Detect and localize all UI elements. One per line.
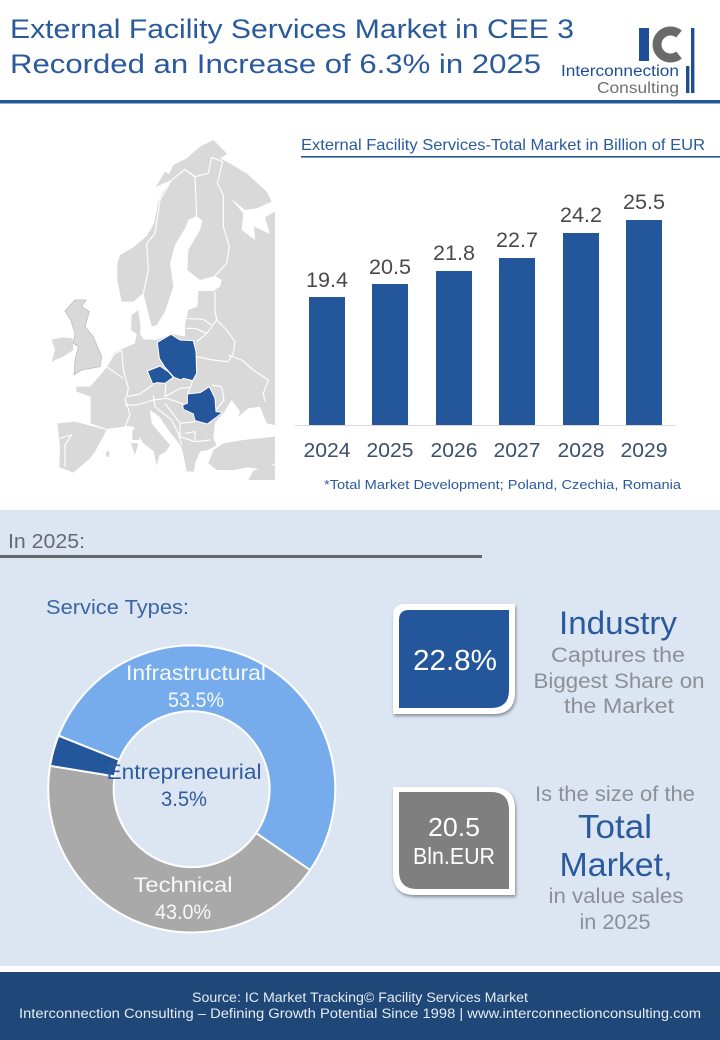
callout text: Industry: the Market	[564, 695, 674, 718]
callout text: Industry: Industry	[559, 605, 677, 641]
year labels	[304, 440, 668, 462]
section heading: In 2025: In 2025:	[8, 531, 85, 553]
bar values: 22.7	[496, 229, 538, 252]
year labels: 2025	[366, 440, 414, 462]
donut labels: 3.5%	[161, 788, 207, 811]
bar values: 25.5	[623, 191, 665, 214]
year labels: 2027	[494, 440, 540, 462]
callout text: Total Market: Total	[578, 808, 652, 845]
donut labels: 53.5%	[168, 689, 224, 712]
donut heading: Service Types:	[46, 597, 189, 619]
title	[10, 14, 574, 79]
segment: infrastructural	[58, 645, 335, 870]
year labels: 2024	[304, 440, 350, 462]
chart footnote: *Total Market Development; Poland, Czechia, Romania	[324, 477, 682, 492]
callout text: Total Market: in value sales	[548, 885, 684, 908]
header rule	[0, 100, 720, 104]
callout box: 22.8%: 22.8%	[413, 645, 497, 677]
segment: entrepreneurial	[50, 736, 119, 776]
bar values: 21.8	[433, 242, 475, 265]
year labels: 2028	[558, 440, 604, 462]
highlighted countries: Poland, Czechia, Romania	[147, 334, 223, 424]
donut chart: service types	[48, 645, 335, 933]
bar values	[306, 191, 665, 292]
bars	[309, 220, 662, 425]
callout text: Industry	[534, 605, 704, 718]
callout box: 20.5 Bln.EUR	[393, 787, 515, 895]
logo: Interconnection Consulting: Interconnection	[561, 63, 679, 80]
callout text: Industry: Captures the	[551, 644, 685, 667]
donut labels: Infrastructural	[126, 662, 266, 685]
year labels: 2026	[430, 440, 478, 462]
map of Europe	[52, 130, 283, 480]
bar chart	[295, 191, 676, 462]
callout text: Total Market	[535, 783, 695, 934]
title: Recorded an Increase of 6.3% in 2025	[10, 49, 541, 79]
bar values: 24.2	[560, 204, 602, 227]
callout text: Total Market: in 2025	[580, 911, 650, 934]
chart title: External Facility Services-Total Market in Billion of EUR	[301, 137, 705, 154]
segment: technical	[48, 766, 310, 933]
callout text: Total Market: Market,	[560, 846, 672, 883]
callout box: 20.5 Bln.EUR: Bln.EUR	[413, 843, 495, 869]
panel: 2025 summary	[0, 510, 720, 966]
footer: Source: IC Market Tracking© Facility Services Market	[192, 990, 528, 1005]
year labels: 2029	[620, 440, 668, 462]
logo: Interconnection Consulting	[561, 28, 694, 97]
donut labels: Technical	[134, 874, 232, 897]
callout box: 22.8%	[393, 604, 515, 714]
footer: Interconnection Consulting – Defining Growth Potential Since 1998 | www.interconnectionconsulting.com	[19, 1006, 701, 1021]
northern borders	[60, 157, 229, 467]
callout text: Total Market: Is the size of the	[535, 783, 695, 806]
donut labels	[106, 662, 266, 924]
central and southern borders	[107, 292, 268, 445]
bar values: 19.4	[306, 269, 348, 292]
callout text: Industry: Biggest Share on	[534, 670, 704, 693]
land masses	[52, 140, 275, 480]
bar values: 20.5	[369, 256, 411, 279]
donut labels: 43.0%	[155, 901, 211, 924]
section heading: In 2025	[0, 531, 482, 558]
footer	[0, 972, 720, 1040]
callout box: 20.5 Bln.EUR: 20.5	[428, 812, 480, 842]
title: External Facility Services Market in CEE 3	[10, 14, 574, 44]
donut labels: Entrepreneurial	[106, 761, 262, 784]
logo: Interconnection Consulting: Consulting	[597, 80, 679, 97]
